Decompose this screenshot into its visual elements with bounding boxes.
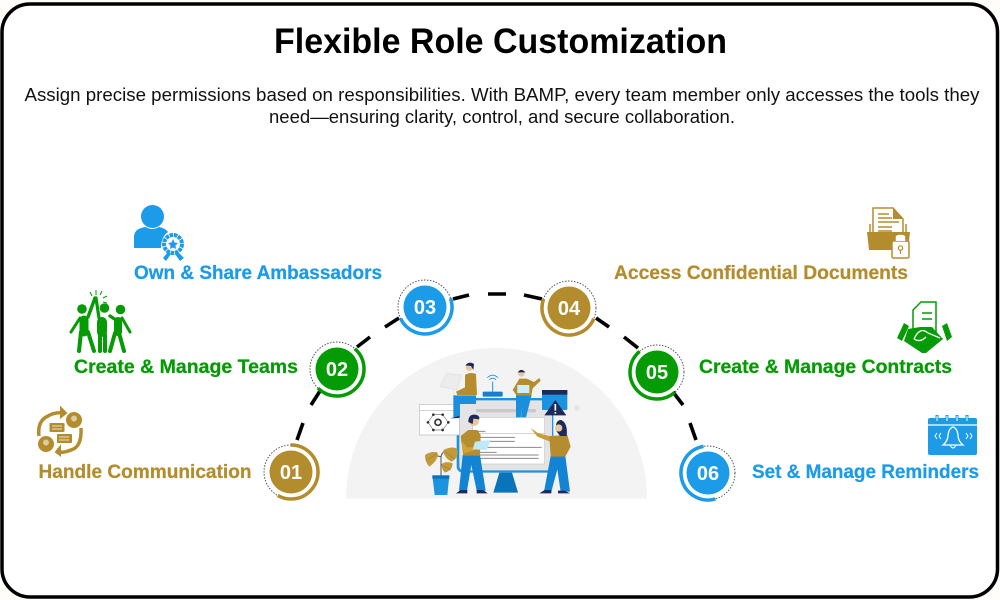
text block: description: Assign precise permissions based on responsibilities. With BAMP, every team member only accesses the tools they <box>24 85 979 105</box>
woman pointing <box>544 456 570 492</box>
seated man <box>453 395 476 417</box>
title: Flexible Role Customization <box>274 21 727 61</box>
network window <box>419 404 459 435</box>
icon: team high five <box>71 290 130 351</box>
man with tablet <box>459 455 486 491</box>
label: Handle Communication: Handle Communication <box>38 462 251 483</box>
step 02 marker: 02 <box>326 359 348 381</box>
central illustration: team at monitor <box>346 348 647 498</box>
step 01 marker <box>264 445 318 499</box>
label: Create & Manage Teams: Create & Manage Teams <box>74 357 298 378</box>
step 03 marker: 03 <box>414 297 436 319</box>
label: Own & Share Ambassadors: Own & Share Ambassadors <box>134 263 382 284</box>
step 05 marker <box>619 334 695 410</box>
icon: contract handshake <box>897 302 952 353</box>
step 04 marker <box>533 272 605 344</box>
icon: user with award badge <box>134 205 184 261</box>
dome background <box>346 348 647 498</box>
step 06 marker: 06 <box>697 463 719 485</box>
step 04 marker: 04 <box>558 298 581 320</box>
step 06 marker <box>675 440 741 506</box>
text block: description <box>24 85 979 127</box>
browser + alert <box>542 390 567 410</box>
monitor <box>493 473 518 493</box>
dashed arc connector <box>297 294 696 440</box>
step 05 marker: 05 <box>646 362 668 384</box>
icon: communication cycle <box>38 408 82 455</box>
label: Set & Manage Reminders: Set & Manage Reminders <box>752 462 979 483</box>
step 03 marker <box>391 273 459 341</box>
faint network <box>440 373 462 407</box>
plant <box>432 449 450 477</box>
label: Create & Manage Contracts: Create & Manage Contracts <box>699 357 952 378</box>
step 01 marker: 01 <box>280 462 302 484</box>
icon: reminder calendar bell <box>928 415 977 455</box>
icon: confidential document folder <box>867 208 910 258</box>
step 02 marker <box>299 331 375 407</box>
text block: description: need—ensuring clarity, control, and secure collaboration. <box>269 107 735 127</box>
seated woman <box>516 395 532 417</box>
label: Access Confidential Documents: Access Confidential Documents <box>614 263 908 284</box>
router <box>483 392 503 397</box>
